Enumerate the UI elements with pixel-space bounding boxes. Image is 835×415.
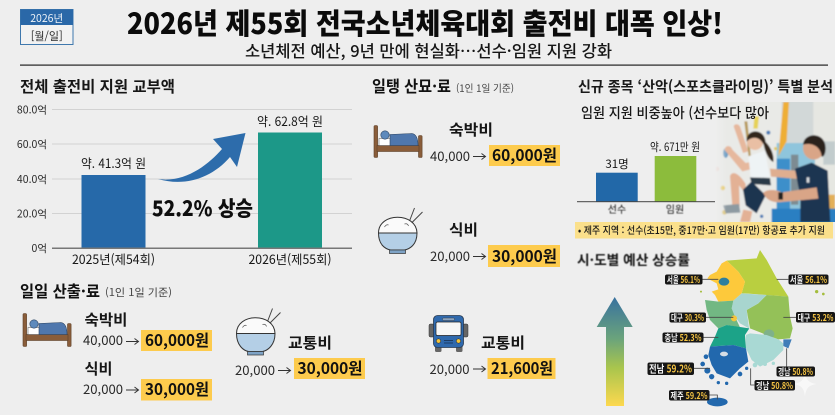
item: meals: 30,000원	[145, 376, 209, 400]
icon: bed	[374, 126, 422, 158]
heading: daily: 일일 산출·료	[20, 278, 100, 302]
date badge	[20, 10, 73, 44]
callout: jeju: 제주 59.2%	[670, 389, 708, 402]
axis label athletes: 선수	[608, 201, 626, 216]
item: lodging: 40,000	[430, 146, 470, 165]
item: lodging: 숙박비	[84, 309, 128, 330]
rise percent: 52.2% 상승	[152, 193, 253, 223]
item: meals: 식비	[84, 358, 112, 379]
label 671: 약. 671만 원	[650, 139, 700, 155]
item: lodging: 40,000	[83, 330, 123, 349]
date badge: [월/일]	[31, 28, 63, 44]
label 31: 31명	[605, 156, 629, 172]
y axis labels: 0억	[32, 241, 47, 256]
axis label officials: 임원	[666, 201, 684, 216]
callout: daegu left: 대구 30.3%	[671, 311, 704, 324]
item: lodging: 60,000원	[492, 142, 557, 166]
heading: climbing: 신규 종목 ‘산악(스포츠클라이밍)’ 특별 분석	[578, 76, 833, 97]
item: meals	[430, 219, 560, 267]
panel: climbing analysis	[575, 76, 835, 238]
item: meals: 식비	[449, 219, 478, 240]
icon: bed	[23, 314, 71, 346]
y axis labels: 40.0억	[17, 172, 47, 187]
rise arrow	[158, 133, 246, 182]
bar 2025	[82, 175, 146, 248]
item: transport	[235, 332, 365, 379]
label 41.3: 약. 41.3억 원	[81, 153, 146, 172]
icon: bus	[429, 316, 468, 352]
y axis labels: 80.0억	[17, 102, 47, 118]
item: lodging: 숙박비	[449, 119, 493, 140]
coach	[770, 169, 798, 179]
callout: chungnam: 충남 52.3%	[664, 331, 702, 344]
panel: total support bar chart	[17, 75, 352, 268]
basis note: (1인 1일 기준)	[105, 285, 172, 300]
y axis labels: 60.0억	[17, 137, 47, 152]
item: lodging	[430, 119, 560, 166]
icon: rice bowl	[236, 308, 280, 355]
y axis labels	[17, 102, 47, 256]
item: transport: 교통비	[288, 332, 332, 353]
bar 2026	[258, 132, 322, 248]
callout: gyeongnam upper: 경남 50.8%	[778, 365, 813, 378]
subtitle: 소년체전 예산, 9년 만에 현실화…선수·임원 지원 강화	[245, 38, 612, 62]
callout: seoul left: 서울 56.1%	[667, 273, 700, 286]
item: meals: 20,000	[430, 246, 470, 265]
heading: total: 전체 출전비 지원 교부액	[20, 75, 175, 97]
item: lodging	[83, 309, 212, 351]
climber	[744, 121, 752, 165]
callout: gyeongnam lower: 경남 50.8%	[756, 379, 793, 392]
leader lines	[694, 279, 796, 399]
category 2026: 2026년(제55회)	[248, 249, 332, 268]
item: meals: 20,000	[83, 379, 123, 398]
label 62.8: 약. 62.8억 원	[257, 111, 323, 130]
item: transport: 20,000	[235, 360, 275, 379]
korea map	[694, 250, 825, 406]
basis note: (1인 1일 기준)	[456, 80, 514, 95]
title: 2026년 제55회 전국소년체육대회 출전비 대폭 인상!	[127, 1, 723, 43]
icon: rice bowl	[378, 208, 422, 254]
item: lodging: 60,000원	[145, 327, 209, 351]
y axis labels: 20.0억	[17, 206, 47, 222]
panel: daily cost left	[20, 278, 365, 400]
item: transport: 20,000	[430, 359, 470, 378]
item: meals: 30,000원	[492, 243, 557, 267]
category 2025: 2025년(제54회)	[72, 249, 155, 268]
bar: officials	[655, 156, 696, 202]
item: transport: 30,000원	[298, 355, 362, 379]
panel: daily cost center	[372, 73, 560, 379]
heading: center: 일탱 산묘·료	[372, 73, 451, 97]
item: transport: 교통비	[481, 332, 525, 353]
callout: seoul right: 서울 56.1%	[790, 273, 827, 286]
item: transport	[430, 332, 556, 379]
date badge: 2026년	[30, 11, 63, 26]
callout: jeonnam: 전남 59.2%	[649, 362, 692, 376]
gradient arrow	[597, 297, 633, 406]
item: meals	[83, 358, 212, 400]
heading: regional: 시·도별 예산 상승률	[577, 249, 690, 269]
bar: athletes	[596, 173, 638, 202]
panel: regional map	[577, 249, 835, 406]
sparkle	[793, 372, 817, 397]
photo: climbing coach and child	[712, 98, 835, 225]
subheading: 임원 지원 비중높아 (선수보다 많아	[581, 103, 769, 123]
item: transport: 21,600원	[491, 355, 553, 379]
